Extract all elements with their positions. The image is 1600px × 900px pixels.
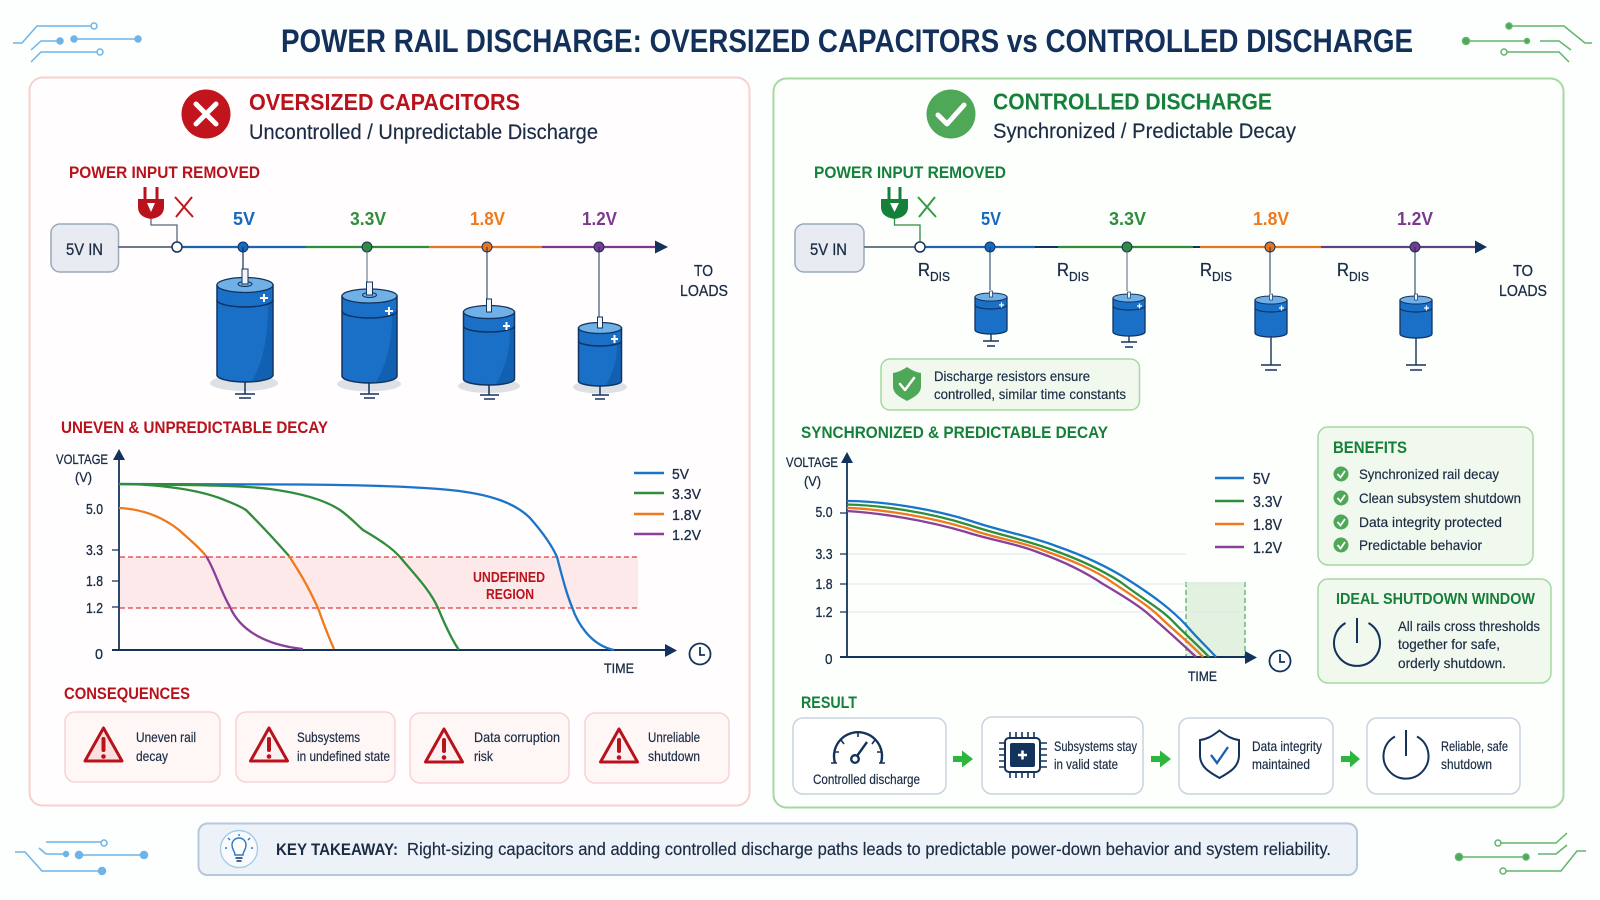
rail labels: 1.8V <box>1253 209 1289 229</box>
takeaway text: Right-sizing capacitors and adding controlled discharge paths leads to predictable power-down behavior and system reliability. <box>407 839 1331 859</box>
legend: 3.3V <box>1253 494 1283 511</box>
icon: clock <box>1270 650 1290 672</box>
icon: gauge <box>831 732 885 763</box>
y axis labels: 1.2 <box>86 600 103 617</box>
card: subsystems in undefined state: in undefined state <box>297 748 390 764</box>
rail labels: 5V <box>981 209 1001 229</box>
y axis labels <box>786 454 838 668</box>
panel: benefits: Predictable behavior <box>1359 537 1482 553</box>
y axis labels: VOLTAGE <box>56 451 108 467</box>
card: reliable safe shutdown: shutdown <box>1441 756 1492 772</box>
rail labels: 1.2V <box>1397 209 1433 229</box>
check icons <box>1334 466 1348 552</box>
capacitor 5V <box>210 247 278 398</box>
heading: oversized capacitors: OVERSIZED CAPACITORS <box>249 89 520 115</box>
legend <box>1215 471 1283 557</box>
capacitor 3.3V <box>337 247 401 398</box>
panel: ideal shutdown window: All rails cross thresholds <box>1398 618 1540 634</box>
heading: controlled discharge: CONTROLLED DISCHARGE <box>993 88 1272 114</box>
discharge resistor labels: R <box>1057 260 1069 280</box>
y axis labels: 1.8 <box>816 576 832 593</box>
y axis labels: 5.0 <box>816 504 832 521</box>
card: subsystems in undefined state <box>236 712 395 782</box>
discharge resistor labels: DIS <box>1069 269 1089 284</box>
legend: 1.2V <box>672 527 701 544</box>
undefined region band <box>120 557 638 608</box>
card: data corruption risk <box>410 713 569 783</box>
y axis labels: (V) <box>804 473 821 489</box>
heading: result: RESULT <box>801 694 857 712</box>
y axis labels: 0 <box>95 646 103 663</box>
y axis labels: 0 <box>825 651 832 668</box>
box: 5V in: 5V IN <box>810 240 847 259</box>
capacitor 1.2V <box>573 247 627 399</box>
box: 5V in <box>51 224 118 272</box>
panel: ideal shutdown window: orderly shutdown. <box>1398 655 1506 671</box>
panel: benefits <box>1318 427 1533 565</box>
card: controlled discharge <box>793 718 946 794</box>
panel: ideal shutdown window <box>1318 579 1551 683</box>
curves <box>847 501 1216 657</box>
y axis labels: 3.3 <box>86 542 103 559</box>
label: to loads: LOADS <box>1499 283 1547 300</box>
arrow <box>953 750 973 768</box>
card: data corruption risk: risk <box>474 748 494 764</box>
title: POWER RAIL DISCHARGE: OVERSIZED CAPACITORS vs CONTROLLED DISCHARGE <box>281 23 1413 59</box>
axes <box>112 449 677 657</box>
legend: 5V <box>672 466 689 483</box>
panel: benefits: Synchronized rail decay <box>1359 466 1499 482</box>
label: power input removed: POWER INPUT REMOVED <box>814 164 1006 182</box>
curves <box>119 484 614 650</box>
legend: 3.3V <box>672 486 701 503</box>
discharge resistor labels: R <box>1337 260 1349 280</box>
card: data integrity maintained: maintained <box>1252 756 1310 772</box>
icon: shield <box>1200 730 1239 778</box>
undefined region label <box>473 570 545 603</box>
heading: synchronized decay: SYNCHRONIZED & PREDICTABLE DECAY <box>801 424 1108 442</box>
key takeaway banner <box>198 824 1357 875</box>
undefined region label: REGION <box>486 587 534 603</box>
card: unreliable shutdown <box>585 713 729 783</box>
panel: benefits: Data integrity protected <box>1359 514 1502 530</box>
card: subsystems stay in valid state <box>982 717 1143 794</box>
chart: uneven decay <box>56 449 710 676</box>
y axis labels: 1.2 <box>816 604 832 621</box>
time label: TIME <box>604 660 634 676</box>
card: data integrity maintained <box>1179 718 1333 794</box>
icon: red x <box>175 197 193 217</box>
decorative circuit bottom right <box>1456 833 1586 874</box>
legend: 1.8V <box>672 507 701 524</box>
decorative circuit top right <box>1462 23 1592 62</box>
icon: red plug <box>138 187 177 242</box>
callout: discharge resistors: controlled, similar time constants <box>934 386 1126 402</box>
box: 5V in: 5V IN <box>66 240 103 259</box>
icon: red cross <box>182 90 230 138</box>
card: unreliable shutdown: Unreliable <box>648 729 700 745</box>
card: reliable safe shutdown: Reliable, safe <box>1441 738 1508 754</box>
card: uneven rail decay <box>65 712 220 782</box>
icon: lightbulb <box>220 830 258 868</box>
card: subsystems in undefined state: Subsystems <box>297 729 360 745</box>
undefined region label: UNDEFINED <box>473 570 545 586</box>
card: uneven rail decay: Uneven rail <box>136 729 196 745</box>
y axis labels: 5.0 <box>86 501 103 518</box>
icon: power <box>1384 730 1428 779</box>
power rail <box>864 240 1487 254</box>
capacitor 1.2V <box>1400 247 1432 370</box>
callout: discharge resistors <box>881 359 1140 410</box>
decorative circuit top left <box>13 23 141 62</box>
icon: power <box>1334 618 1380 666</box>
panel: oversized capacitors <box>30 78 750 806</box>
label: power input removed: POWER INPUT REMOVED <box>69 164 260 182</box>
arrow <box>1151 750 1171 768</box>
rail labels <box>981 209 1433 229</box>
card: controlled discharge: Controlled discharge <box>813 771 920 787</box>
heading: uneven decay: UNEVEN & UNPREDICTABLE DECAY <box>61 419 328 437</box>
label: to loads <box>680 263 728 300</box>
discharge resistor labels: DIS <box>1212 269 1232 284</box>
label: to loads: TO <box>1513 263 1533 280</box>
rail labels: 3.3V <box>1109 209 1146 229</box>
card: reliable safe shutdown <box>1367 718 1520 794</box>
capacitor 5V <box>975 247 1007 346</box>
capacitor 3.3V <box>1113 247 1145 347</box>
label: to loads <box>1499 263 1547 300</box>
takeaway text: KEY TAKEAWAY: <box>276 840 398 859</box>
card: data integrity maintained: Data integrity <box>1252 738 1322 754</box>
legend: 1.8V <box>1253 517 1283 534</box>
card: data corruption risk: Data corruption <box>474 729 560 745</box>
capacitor 1.8V <box>1255 247 1287 370</box>
callout: discharge resistors: Discharge resistors ensure <box>934 368 1090 384</box>
rail labels: 3.3V <box>350 209 386 229</box>
shutdown window <box>1186 582 1245 657</box>
legend: 1.2V <box>1253 540 1283 557</box>
card: subsystems stay in valid state: Subsystems stay <box>1054 738 1137 754</box>
heading: consequences: CONSEQUENCES <box>64 685 190 703</box>
rail labels: 5V <box>233 209 255 229</box>
icon: chip <box>999 732 1047 778</box>
legend <box>634 466 701 544</box>
discharge resistor labels: DIS <box>1349 269 1369 284</box>
y axis labels <box>56 451 108 663</box>
icon: clock <box>690 644 710 664</box>
power rail <box>118 240 668 254</box>
card: subsystems stay in valid state: in valid state <box>1054 756 1118 772</box>
chart: synchronized decay <box>786 452 1290 684</box>
decorative circuit bottom left <box>15 840 148 874</box>
y axis labels: 1.8 <box>86 573 103 590</box>
time label: TIME <box>1188 668 1217 684</box>
capacitor 1.8V <box>458 247 520 399</box>
card: unreliable shutdown: shutdown <box>648 748 700 764</box>
rail labels <box>233 209 617 229</box>
icon: green plug <box>881 187 920 242</box>
icon: green check <box>926 90 976 138</box>
y axis labels: VOLTAGE <box>786 454 838 470</box>
label: to loads: TO <box>694 263 713 280</box>
label: to loads: LOADS <box>680 283 728 300</box>
y axis labels: (V) <box>75 469 92 485</box>
legend: 5V <box>1253 471 1271 488</box>
y axis labels: 3.3 <box>816 546 832 563</box>
icon: green x <box>918 197 936 217</box>
box: 5V in <box>795 224 864 272</box>
panel: benefits: Clean subsystem shutdown <box>1359 490 1521 506</box>
panel: benefits: BENEFITS <box>1333 439 1407 457</box>
panel: ideal shutdown window: together for safe, <box>1398 636 1500 652</box>
discharge resistor labels: DIS <box>930 269 950 284</box>
panel: controlled discharge <box>774 78 1564 808</box>
rail labels: 1.2V <box>582 209 617 229</box>
discharge resistor labels <box>918 260 1369 284</box>
axes <box>840 452 1257 664</box>
discharge resistor labels: R <box>1200 260 1212 280</box>
card: uneven rail decay: decay <box>136 748 168 764</box>
panel: ideal shutdown window: IDEAL SHUTDOWN WINDOW <box>1336 591 1536 608</box>
arrow <box>1341 750 1360 768</box>
discharge resistor labels: R <box>918 260 930 280</box>
subheading: Uncontrolled / Unpredictable Discharge <box>249 121 598 144</box>
rail labels: 1.8V <box>470 209 505 229</box>
subheading: Synchronized / Predictable Decay <box>993 120 1296 143</box>
